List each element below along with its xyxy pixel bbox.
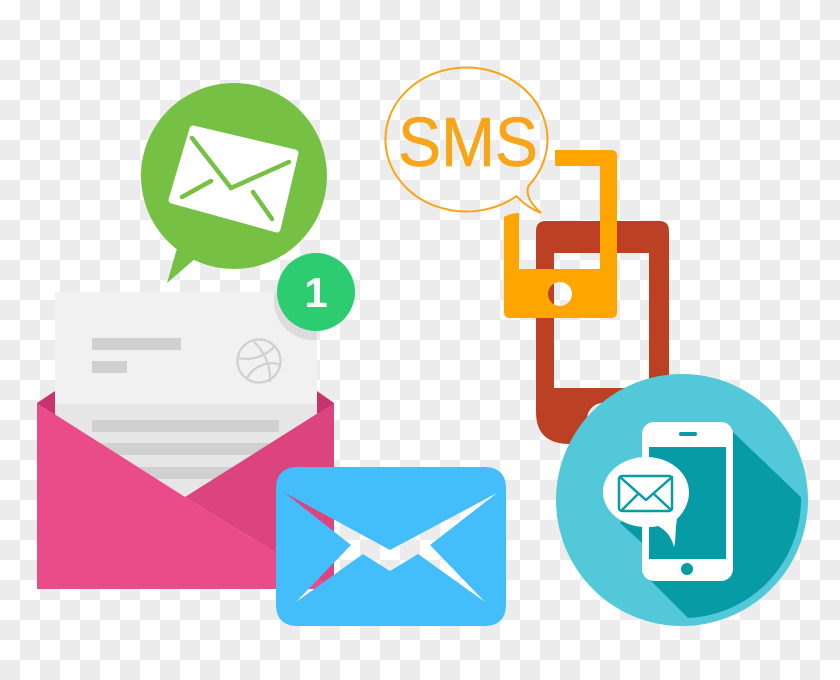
phone home button <box>681 563 693 575</box>
teal disc <box>556 374 808 626</box>
envelope back flaps <box>37 391 55 420</box>
bubble envelope <box>619 476 672 511</box>
icon: orange phone <box>504 150 617 318</box>
icon: red outline phone <box>536 221 669 444</box>
letter header lines <box>92 338 181 350</box>
envelope right inner panel <box>185 403 334 589</box>
phone screen <box>649 447 726 559</box>
badge shadow on letter <box>274 292 317 340</box>
callout: SMS speech bubble <box>385 68 547 213</box>
bubble outline <box>385 68 547 213</box>
icon: blue envelope with cut-out <box>276 467 506 626</box>
message bubble <box>603 457 689 547</box>
letter body lines <box>92 420 279 432</box>
icon: dribbble ball <box>238 340 281 382</box>
letter sheet <box>55 292 317 500</box>
icon: open pink envelope with letter <box>37 292 334 589</box>
long shadow <box>620 432 801 618</box>
white phone body <box>642 422 733 581</box>
badge number: 1 <box>304 269 328 316</box>
envelope fold lines <box>182 138 289 219</box>
green bubble <box>141 83 327 283</box>
icon: teal mobile message circle <box>556 374 808 626</box>
notification badge <box>277 253 355 331</box>
SMS label: SMS <box>398 103 538 181</box>
white envelope <box>172 129 295 229</box>
icon: green speech bubble with envelope <box>141 83 327 283</box>
phone speaker <box>679 432 697 436</box>
envelope front panel <box>37 403 334 589</box>
